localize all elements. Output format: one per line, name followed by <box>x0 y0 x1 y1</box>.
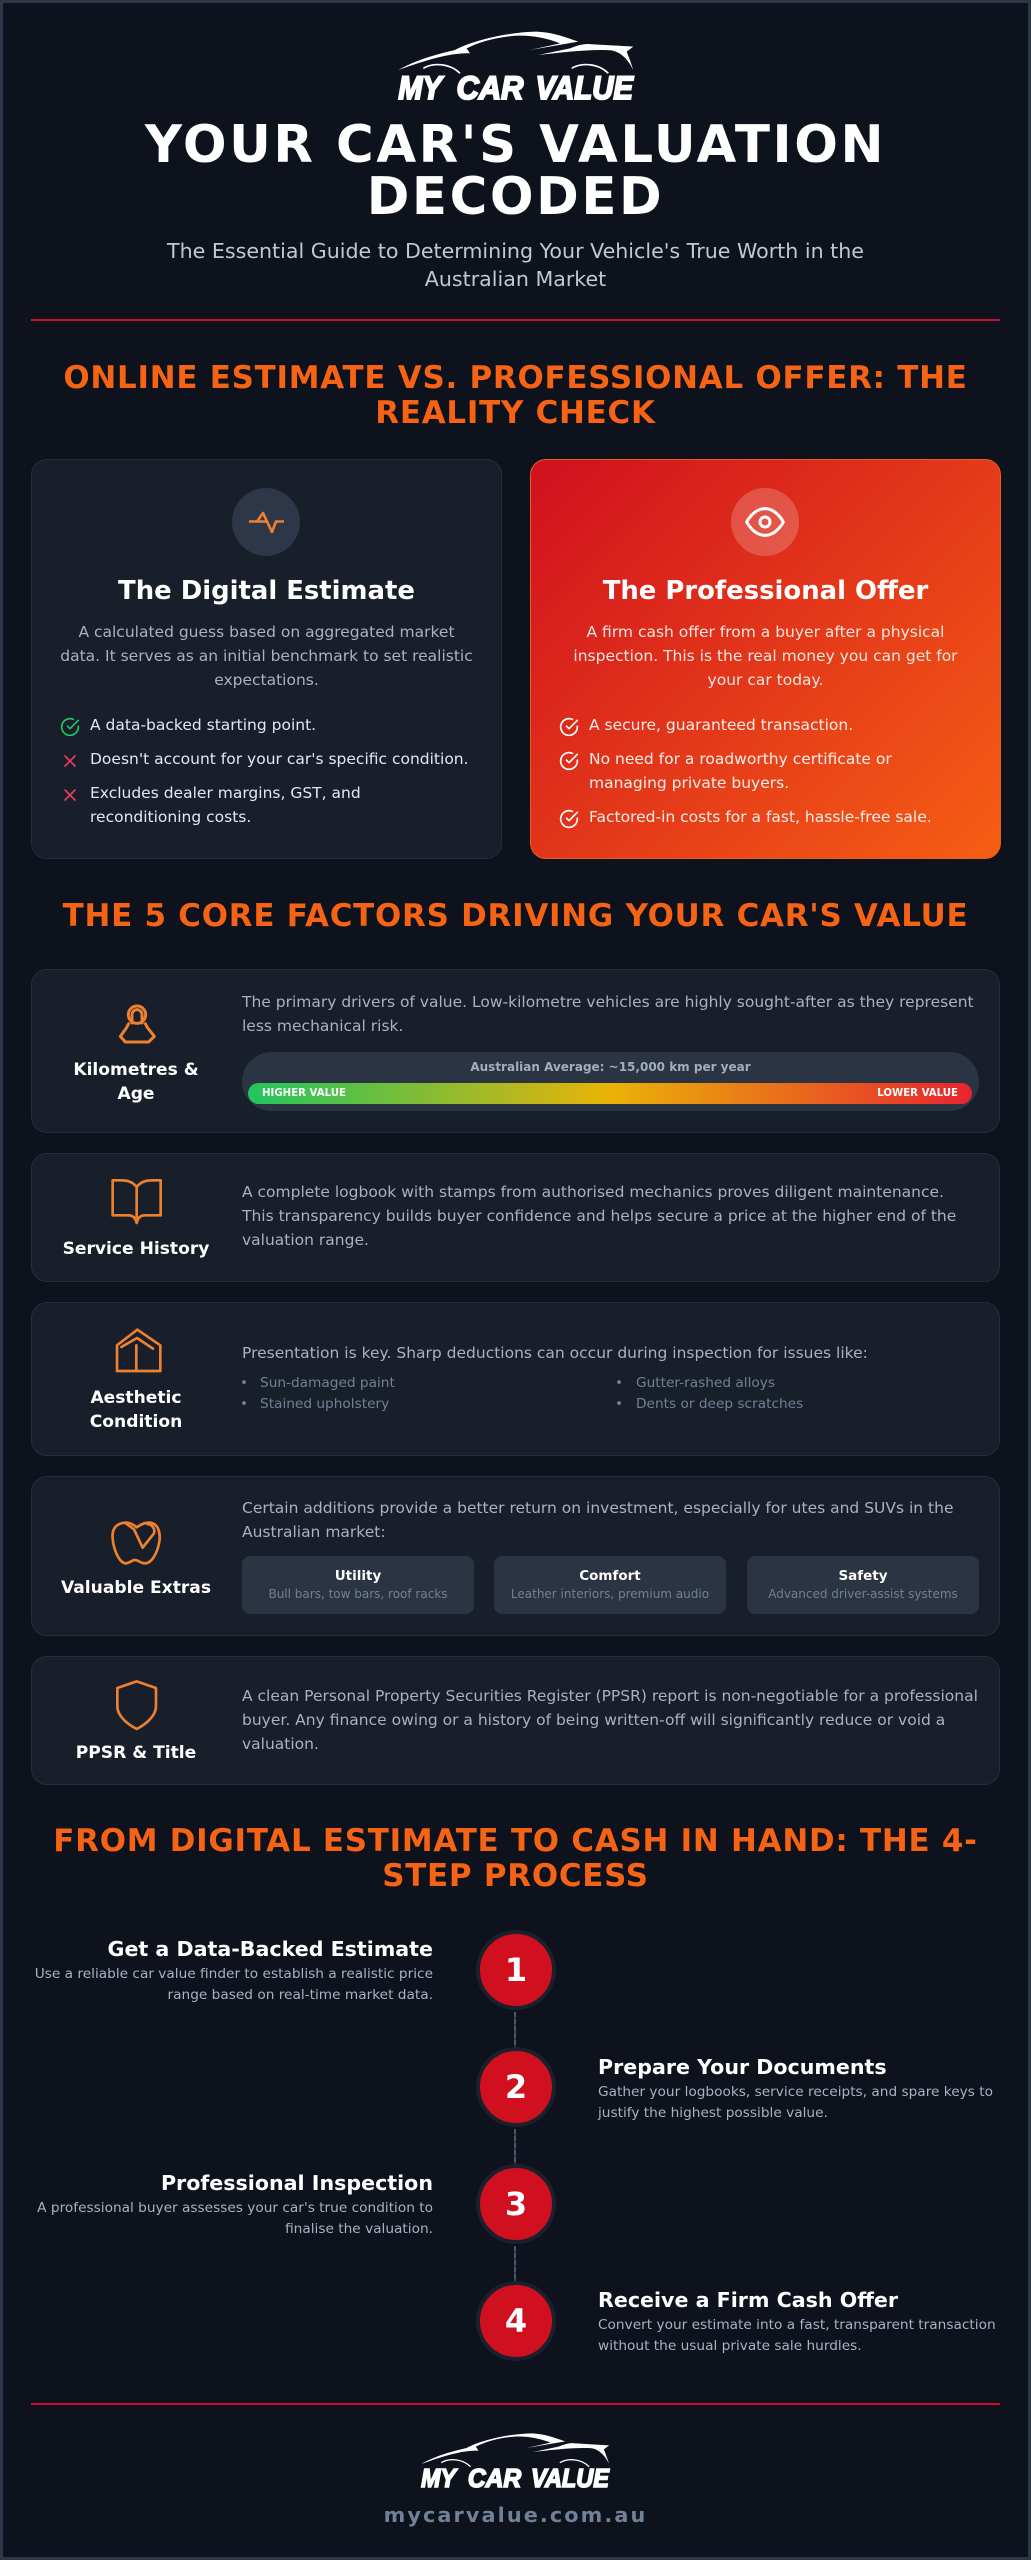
item: check: A data-backed starting point. <box>90 716 316 734</box>
step 4 text <box>598 2288 996 2354</box>
subtitle: Australian Market <box>425 267 606 291</box>
extra: utility: Bull bars, tow bars, roof racks <box>268 1587 448 1601</box>
item: cross: reconditioning costs. <box>90 808 251 826</box>
footer logo: CAR <box>468 2465 522 2493</box>
item: cross: Excludes dealer margins, GST, and <box>90 784 361 802</box>
step 2 text: Gather your logbooks, service receipts, and spare keys to <box>598 2084 993 2100</box>
label: aesthetic condition: Condition <box>90 1412 182 1432</box>
issue list: • <box>615 1375 623 1391</box>
header logo <box>398 32 635 106</box>
text: ppsr: A clean Personal Property Securities Register (PPSR) report is non-negotiable for a professional <box>242 1687 978 1705</box>
step 4 text: Receive a Firm Cash Offer <box>598 2288 898 2312</box>
header logo: CAR <box>457 70 523 106</box>
icon: shield <box>116 1680 158 1730</box>
extra: safety: Safety <box>838 1568 888 1584</box>
step number 4: 4 <box>505 2302 527 2340</box>
heading: core factors: THE 5 CORE FACTORS DRIVING YOUR CAR'S VALUE <box>63 898 968 934</box>
step 2 text: justify the highest possible value. <box>598 2104 828 2120</box>
text: aesthetic: Presentation is key. Sharp deductions can occur during inspection for issues like: <box>242 1344 868 1362</box>
step number 3 <box>476 2164 556 2244</box>
item: check: Factored-in costs for a fast, hassle-free sale. <box>589 808 932 826</box>
icon: eye <box>731 488 799 556</box>
label: kilometres and age: Kilometres & <box>73 1060 199 1080</box>
step number 3: 3 <box>505 2185 527 2223</box>
text: kilometres <box>242 993 974 1035</box>
heading: reality check: ONLINE ESTIMATE VS. PROFESSIONAL OFFER: THE <box>63 360 968 396</box>
label: kilometres and age <box>73 1060 199 1104</box>
footer logo: MY <box>421 2465 458 2493</box>
description: A calculated guess based on aggregated market <box>78 623 455 641</box>
description <box>60 623 473 689</box>
panel: professional offer <box>530 459 1001 859</box>
step 4 text: without the usual private sale hurdles. <box>598 2338 862 2354</box>
description: A firm cash offer from a buyer after a physical <box>587 623 944 641</box>
step 4 text: Convert your estimate into a fast, transparent transaction <box>598 2317 996 2333</box>
label: aesthetic condition <box>90 1388 182 1432</box>
heading: process <box>53 1823 978 1894</box>
description: inspection. This is the real money you can get for <box>573 647 958 665</box>
text: extras: Australian market: <box>242 1523 386 1541</box>
issue list: Sun-damaged paint <box>260 1375 395 1391</box>
issue list: Stained upholstery <box>260 1396 389 1412</box>
feature list <box>560 716 932 828</box>
extra: comfort <box>494 1556 726 1614</box>
gradient bar: LOWER VALUE <box>877 1088 958 1099</box>
item: check: No need for a roadworthy certificate or <box>589 750 892 768</box>
subtitle: The Essential Guide to Determining Your Vehicle's True Worth in the <box>167 239 864 263</box>
icon: activity pulse <box>232 488 300 556</box>
text: extras: Certain additions provide a better return on investment, especially for utes and SUVs in the <box>242 1499 953 1517</box>
panel: valuable extras <box>31 1476 1000 1636</box>
extra: comfort: Leather interiors, premium audio <box>511 1587 709 1601</box>
item: check: managing private buyers. <box>589 774 789 792</box>
scale caption: Australian Average: ~15,000 km per year <box>470 1060 751 1074</box>
extra: comfort: Comfort <box>579 1568 641 1584</box>
icon: house <box>116 1328 162 1372</box>
title: YOUR CAR'S VALUATION <box>145 115 886 175</box>
panel: service history <box>31 1153 1000 1282</box>
extra: utility <box>242 1556 474 1614</box>
step 2 text: Prepare Your Documents <box>598 2055 887 2079</box>
label: aesthetic condition: Aesthetic <box>90 1388 182 1408</box>
issue list: • <box>615 1396 623 1412</box>
footer logo: VALUE <box>531 2465 610 2493</box>
issue list: Dents or deep scratches <box>636 1396 803 1412</box>
connector <box>514 2246 516 2282</box>
label: ppsr and title: PPSR & Title <box>76 1743 196 1763</box>
label: kilometres and age: Age <box>117 1084 155 1104</box>
heading: professional offer: The Professional Offer <box>603 576 928 606</box>
issue list <box>240 1375 803 1412</box>
heading: process: STEP PROCESS <box>382 1858 649 1894</box>
heading: process: FROM DIGITAL ESTIMATE TO CASH IN HAND: THE 4- <box>53 1823 978 1859</box>
heading: digital estimate: The Digital Estimate <box>118 576 415 606</box>
heading: reality check: REALITY CHECK <box>375 395 656 431</box>
text: kilometres: less mechanical risk. <box>242 1017 403 1035</box>
text: extras <box>242 1499 953 1541</box>
item: cross: Doesn't account for your car's specific condition. <box>90 750 469 768</box>
extra: safety: Advanced driver-assist systems <box>768 1587 958 1601</box>
icon: heart <box>111 1521 162 1565</box>
header logo: VALUE <box>536 70 635 106</box>
footer url: mycarvalue.com.au <box>384 2503 647 2527</box>
issue list: Gutter-rashed alloys <box>636 1375 775 1391</box>
gradient bar <box>248 1083 972 1104</box>
panel: digital estimate <box>31 459 502 859</box>
text: ppsr <box>242 1687 978 1753</box>
subtitle <box>166 239 864 291</box>
text: service history <box>242 1183 956 1249</box>
title <box>144 115 886 226</box>
text: kilometres: The primary drivers of value. Low-kilometre vehicles are highly sought-after as they represent <box>242 993 974 1011</box>
panel: aesthetic condition <box>31 1302 1000 1456</box>
header logo: MY <box>398 70 444 106</box>
step number 2: 2 <box>505 2068 527 2106</box>
step number 1 <box>476 1930 556 2010</box>
connector <box>514 2129 516 2165</box>
extra: utility: Utility <box>335 1568 381 1584</box>
step 2 text <box>598 2055 993 2120</box>
step 3 text: finalise the valuation. <box>285 2220 433 2236</box>
icon: book <box>111 1179 162 1224</box>
step 3 text <box>37 2171 433 2236</box>
feature list <box>60 716 469 826</box>
icon: kilometres <box>118 1004 156 1044</box>
step number 2 <box>476 2047 556 2127</box>
item: cross <box>64 784 361 826</box>
description: expectations. <box>214 671 319 689</box>
text: service history: A complete logbook with stamps from authorised mechanics proves diligent maintenance. <box>242 1183 944 1201</box>
step 3 text: Professional Inspection <box>161 2171 433 2195</box>
divider <box>31 2403 1000 2405</box>
step 3 text: A professional buyer assesses your car's true condition to <box>37 2200 433 2216</box>
step 1 text: Get a Data-Backed Estimate <box>108 1937 433 1961</box>
footer logo <box>420 2433 610 2493</box>
step number 4 <box>476 2281 556 2361</box>
connector <box>514 2012 516 2048</box>
text: service history: valuation range. <box>242 1231 369 1249</box>
issue list: • <box>240 1396 248 1412</box>
value scale <box>242 1052 979 1111</box>
heading: reality check <box>63 360 968 431</box>
step 1 text: Use a reliable car value finder to establish a realistic price <box>35 1966 433 1982</box>
issue list: • <box>240 1375 248 1391</box>
label: service history: Service History <box>63 1239 209 1259</box>
item: check <box>560 750 892 792</box>
label: valuable extras: Valuable Extras <box>61 1578 211 1598</box>
step number 1: 1 <box>505 1951 527 1989</box>
item: check: A secure, guaranteed transaction. <box>589 716 853 734</box>
divider <box>31 319 1000 321</box>
text: service history: This transparency builds buyer confidence and helps secure a price at the higher end of the <box>242 1207 956 1225</box>
panel: ppsr and title <box>31 1656 1000 1785</box>
gradient bar: HIGHER VALUE <box>262 1088 346 1099</box>
description: data. It serves as an initial benchmark to set realistic <box>60 647 473 665</box>
description <box>573 623 958 689</box>
step 1 text <box>35 1937 433 2002</box>
extra: safety <box>747 1556 979 1614</box>
title: DECODED <box>367 166 664 226</box>
step 1 text: range based on real-time market data. <box>168 1986 433 2002</box>
description: your car today. <box>708 671 823 689</box>
text: ppsr: valuation. <box>242 1735 319 1753</box>
panel: kilometres and age <box>31 969 1000 1133</box>
text: ppsr: buyer. Any finance owing or a history of being written-off will significantly reduce or void a <box>242 1711 945 1729</box>
